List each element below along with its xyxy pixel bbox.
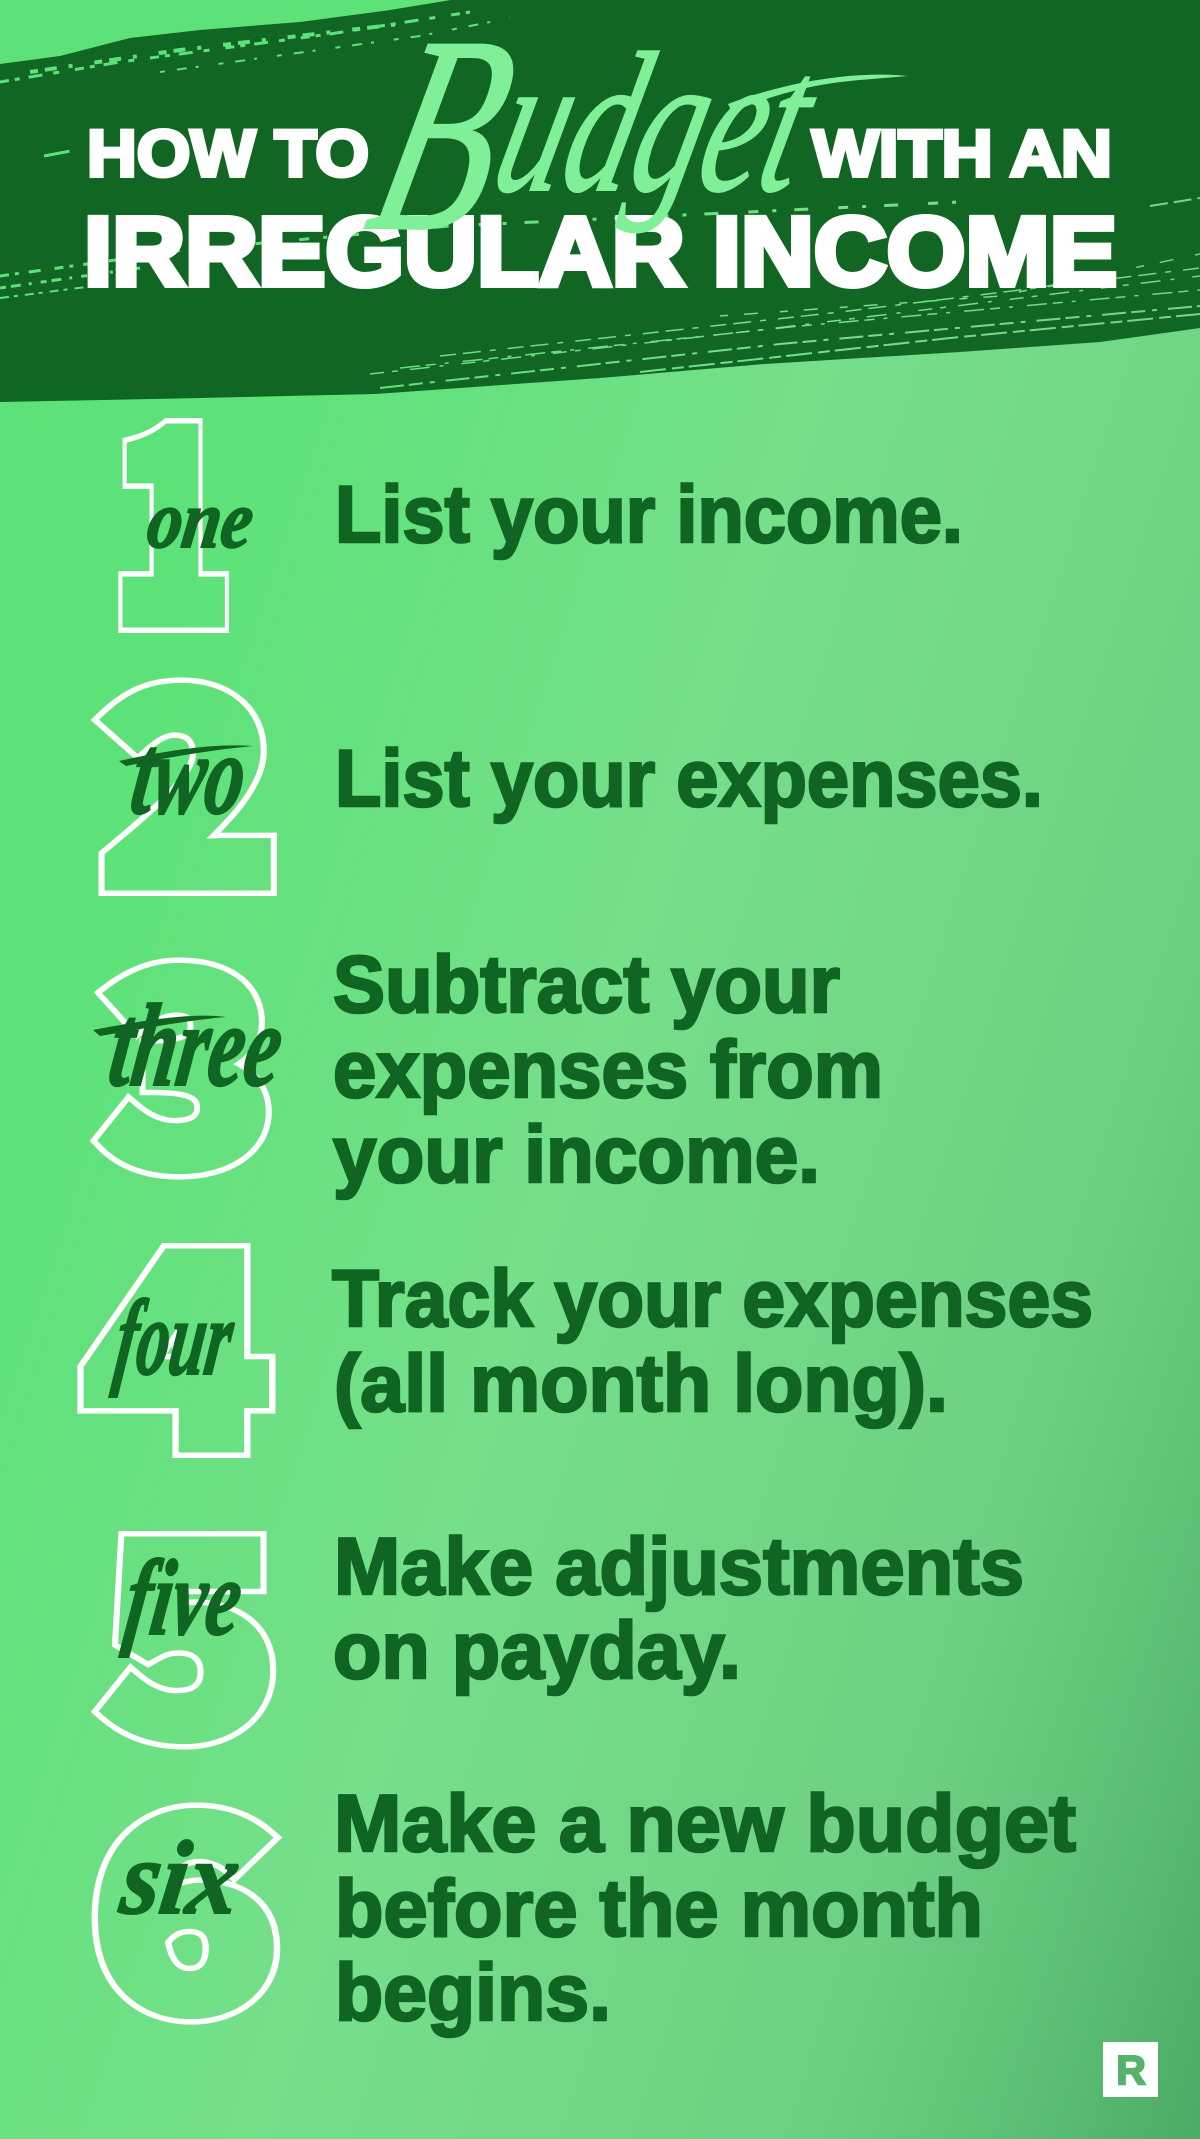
script word: two [119,711,254,838]
numeral outline 1: 1 [112,316,232,697]
step text [332,1254,1093,1429]
step text [333,940,883,1200]
title line: how to: HOW TO [87,116,369,190]
title line: irregular income: IRREGULAR INCOME [84,197,1117,306]
numeral outline 3: 3 [100,859,274,1240]
step 5 [101,1429,1024,1810]
script word: six: six [114,1819,247,1936]
numeral outline 2: 2 [100,579,278,960]
step text: (all month long). [334,1339,948,1429]
numeral outline 6: 6 [92,1704,278,2085]
numeral outline 5: 5 [101,1429,279,1810]
logo badge [1103,2042,1158,2097]
step text: Make a new budget [334,1779,1076,1869]
script word: two: two [125,711,254,838]
step text [334,1779,1076,2038]
step text: Subtract your [333,940,840,1030]
title script word: budget [347,0,908,289]
step text: Track your expenses [332,1254,1093,1344]
numeral outline 4: 4 [84,1141,270,1522]
title line: with an: WITH AN [812,116,1112,190]
step text: Make adjustments [334,1522,1024,1612]
script word: three [93,980,291,1111]
step text: on payday. [333,1606,741,1696]
logo badge: R [1116,2047,1146,2093]
step 2 [100,579,1043,960]
step 6 [92,1704,1076,2085]
numeral outline 1: 1 [112,316,232,697]
step text: List your income. [335,470,963,560]
numeral outline 3: 3 [100,859,274,1240]
title [84,0,1117,306]
step text [333,1522,1024,1696]
header brush banner [0,0,1200,402]
numeral outline 6: 6 [92,1704,278,2085]
step text: List your expenses. [335,734,1043,824]
title script word: budget: udget [477,11,838,234]
script word: five: five [119,1538,249,1658]
step text: begins. [335,1948,611,2038]
step text: expenses from [333,1025,883,1115]
numeral outline 2: 2 [100,579,278,960]
step text: before the month [335,1864,983,1954]
script word: three: three [102,980,291,1111]
step text: your income. [333,1110,820,1200]
numeral outline 4: 4 [84,1141,270,1522]
numeral outline 5: 5 [101,1429,279,1810]
step 1 [112,316,963,697]
script word: one: one [142,474,259,565]
script word: four: four [109,1278,241,1398]
step 3 [93,859,883,1240]
step 4 [84,1141,1093,1522]
